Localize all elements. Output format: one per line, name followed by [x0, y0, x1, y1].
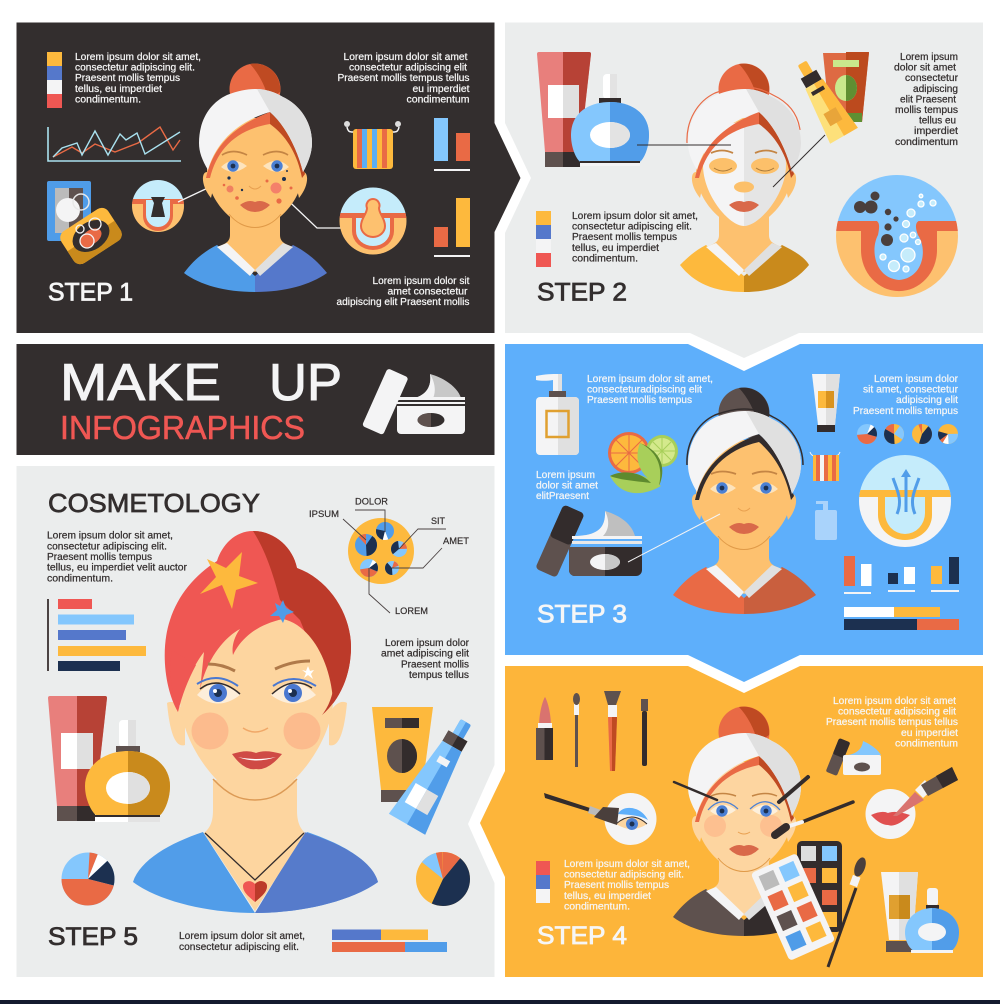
- text block: step 5 bottom: consectetur adipiscing elit.: [179, 942, 299, 953]
- panel: step 2: [505, 22, 983, 358]
- text block: step 1 left: Praesent mollis tempus: [75, 73, 180, 84]
- icon: green tube: [823, 52, 869, 122]
- text block: step 2 left: tellus, eu imperdiet: [572, 243, 659, 254]
- step 2 label: STEP 2: [537, 278, 627, 306]
- text block: cosmetology intro: consectetur adipiscing elit.: [47, 541, 167, 552]
- icon: cream jar: [362, 368, 465, 435]
- icon: citrus and leaves: [608, 432, 678, 493]
- icon: small jar: [826, 738, 881, 776]
- text block: step 2 top right: tellus eu: [919, 116, 956, 127]
- text block: cosmetology intro: tellus, eu imperdiet velit auctor: [47, 563, 188, 574]
- panel: step 4: [480, 666, 983, 977]
- text block: step 4 top right: eu imperdiet: [901, 728, 958, 739]
- text block: step 3 mid left: [536, 470, 598, 502]
- woman: step 2 with mask: [680, 64, 809, 292]
- chart labels: [309, 496, 469, 617]
- text block: step 3 mid left: Lorem ipsum: [536, 470, 595, 481]
- icon: blue perfume: [571, 74, 649, 166]
- text block: cosmetology intro: condimentum.: [47, 573, 113, 584]
- text block: step 1 top right: Lorem ipsum dolor sit amet: [344, 52, 468, 63]
- text block: step 1 top right: consectetur adipiscing elit: [349, 63, 467, 74]
- text block: step 1 top right: eu imperdiet: [412, 84, 470, 95]
- text block: step 3 top right: [853, 374, 959, 417]
- icon: yellow perfume: [85, 720, 170, 822]
- callout line: pimple: [275, 188, 345, 228]
- heading: cosmetology: COSMETOLOGY: [48, 490, 260, 518]
- icon: eye makeup: [604, 793, 656, 845]
- small pie charts: [857, 424, 958, 444]
- text block: step 4 left: [564, 859, 690, 912]
- chart labels: IPSUM: [309, 509, 339, 520]
- callout line: tube to mask: [773, 135, 825, 187]
- bar chart: blue and orange: [434, 118, 470, 171]
- text block: step 2 top right: adipiscing: [913, 84, 958, 95]
- step 1 label: STEP 1: [48, 278, 133, 306]
- stacked bars: step 3: [844, 607, 959, 630]
- icon: white tube: [812, 374, 840, 432]
- text block: step 2 left: Praesent mollis tempus: [572, 232, 677, 243]
- bar charts: step 3: [844, 556, 959, 594]
- text block: step 5 right: amet adipiscing elit: [381, 649, 469, 660]
- icon: white palette: [751, 853, 835, 961]
- chart: palette pie cluster: [343, 510, 446, 613]
- text block: step 3 top left: consecteturadipiscing elit: [587, 385, 702, 396]
- panel: title: [16, 344, 494, 455]
- colour swatches: [47, 52, 62, 108]
- panel: step 3: [505, 344, 983, 682]
- text block: step 2 top right: mollis tempus: [895, 105, 958, 116]
- text block: step 3 top left: [587, 374, 713, 406]
- bottom bar: [0, 1000, 1000, 1004]
- text block: step 3 top right: sit amet, consectetur: [863, 385, 959, 396]
- text block: step 1 left: consectetur adipiscing elit.: [75, 63, 195, 74]
- text block: step 4 left: condimentum.: [564, 901, 630, 912]
- heading: make up: UP: [269, 354, 342, 412]
- icon: small brush: [573, 693, 580, 767]
- heading: make up: [60, 354, 342, 412]
- text block: step 1 left: condimentum.: [75, 94, 141, 105]
- icon: pump bottle: [536, 374, 579, 455]
- line chart: [48, 127, 181, 161]
- text block: step 2 left: [572, 211, 698, 264]
- heading: infographics: INFOGRAPHICS: [60, 409, 305, 446]
- text block: step 2 top right: consectetur: [905, 73, 959, 84]
- icon: dark cream jar: [535, 504, 642, 578]
- icon: white tube and blue perfume: [881, 872, 959, 953]
- icon: eye brush: [544, 793, 619, 825]
- text block: step 3 top right: Lorem ipsum dolor: [874, 374, 959, 385]
- panel: step 1: [16, 22, 520, 333]
- chart labels: DOLOR: [355, 496, 388, 508]
- icon: cleansing bubbles: [880, 194, 936, 272]
- text block: step 1 left: Lorem ipsum dolor sit amet,: [75, 52, 201, 63]
- text block: step 4 top right: Praesent mollis tempus tellus: [826, 717, 958, 728]
- text block: step 5 bottom: [179, 931, 305, 953]
- text block: step 5 right: tempus tellus: [409, 670, 469, 681]
- text block: step 2 left: Lorem ipsum dolor sit amet,: [572, 211, 698, 222]
- text block: step 1 left: tellus, eu imperdiet: [75, 84, 162, 95]
- stacked bars: step 5: [332, 930, 447, 952]
- icon: striped towel: [810, 452, 840, 481]
- text block: step 3 top left: Praesent mollis tempus: [587, 395, 692, 406]
- text block: step 4 left: Lorem ipsum dolor sit amet,: [564, 859, 690, 870]
- text block: cosmetology intro: Praesent mollis tempus: [47, 552, 152, 563]
- pie chart: left: [62, 852, 114, 906]
- text block: step 2 top right: imperdiet: [914, 126, 958, 137]
- text block: step 3 mid left: elitPraesent: [536, 491, 589, 502]
- panel: step 5 cosmetology: [16, 466, 494, 977]
- icon: dark palette: [797, 841, 842, 932]
- icon: pore cleansing circle: [836, 175, 958, 298]
- text block: step 4 left: tellus, eu imperdiet: [564, 891, 651, 902]
- icon: upward arrows: [893, 469, 919, 514]
- text block: step 4 top right: Lorem ipsum dolor sit amet: [833, 696, 956, 707]
- icon: blue tube: [389, 712, 484, 835]
- icon: yellow tube: [372, 707, 433, 802]
- chart labels: AMET: [443, 536, 469, 547]
- text block: step 4 top right: consectetur adipiscing elit: [838, 707, 956, 718]
- woman: step 1: [184, 64, 327, 292]
- icon: blackhead pore callout: [132, 180, 184, 232]
- text block: step 2 top right: elit Praesent: [900, 94, 956, 105]
- step 4 label: STEP 4: [537, 922, 627, 950]
- text block: step 5 bottom: Lorem ipsum dolor sit amet,: [179, 931, 305, 942]
- text block: step 3 top left: Lorem ipsum dolor sit amet,: [587, 374, 713, 385]
- callout line: blackhead: [178, 178, 229, 202]
- text block: step 1 bottom right: amet consectetur: [388, 287, 468, 298]
- callout line: perfume to mask: [637, 144, 731, 146]
- colour swatches: [536, 211, 551, 267]
- text block: step 1 top right: condimentum: [406, 94, 470, 105]
- callout line: jar to cheek: [628, 514, 720, 562]
- text block: step 4 top right: condimentum: [895, 738, 958, 749]
- text block: step 2 top right: dolor sit amet: [894, 63, 956, 74]
- text block: step 4 left: Praesent mollis tempus: [564, 880, 669, 891]
- step 5 label: STEP 5: [48, 923, 138, 951]
- icon: towel: [344, 121, 401, 169]
- woman: step 5 large portrait: [133, 531, 378, 913]
- icon: red tube: [48, 696, 107, 821]
- icon: lipstick: [536, 697, 553, 760]
- text block: step 5 right: [381, 638, 470, 681]
- icon: mascara: [641, 699, 648, 766]
- text block: step 5 right: Praesent mollis: [401, 659, 469, 670]
- text block: step 5 right: Lorem ipsum dolor: [385, 638, 470, 649]
- icon: pale bottle: [815, 501, 837, 540]
- icon: powder brush: [604, 691, 621, 771]
- icon: red tube: [537, 52, 591, 167]
- pie chart: right: [416, 852, 470, 906]
- text block: step 2 left: condimentum.: [572, 253, 638, 264]
- text block: step 3 top right: adipiscing elit: [896, 395, 958, 406]
- text block: step 2 top right: [894, 52, 959, 148]
- woman: step 3: [673, 388, 816, 614]
- text block: step 2 top right: Lorem ipsum: [900, 52, 958, 63]
- text block: step 1 bottom right: adipiscing elit Praesent mollis: [336, 297, 470, 308]
- text block: step 1 bottom right: Lorem ipsum dolor sit: [372, 276, 470, 287]
- text block: step 3 top right: Praesent mollis tempus: [853, 406, 958, 417]
- icon: long brush: [828, 856, 868, 967]
- heading: make up: MAKE: [60, 354, 221, 412]
- icon: soap and card: [47, 181, 125, 267]
- text block: step 1 bottom right: [336, 276, 470, 308]
- icon: pimple pore callout: [339, 187, 407, 256]
- icon: lips with lipstick: [866, 767, 958, 839]
- colour swatches: [536, 861, 550, 903]
- chart labels: SIT: [431, 516, 445, 527]
- text block: step 1 left: [75, 52, 201, 105]
- text block: step 2 left: consectetur adipiscing elit.: [572, 222, 692, 233]
- text block: step 4 top right: [826, 696, 958, 749]
- text block: cosmetology intro: Lorem ipsum dolor sit amet,: [47, 531, 173, 542]
- chart labels: LOREM: [395, 606, 428, 617]
- step 3 label: STEP 3: [537, 600, 627, 628]
- text block: step 1 top right: Praesent mollis tempus tellus: [338, 73, 470, 84]
- text block: step 2 top right: condimentum: [895, 137, 958, 148]
- text block: step 4 left: consectetur adipiscing elit.: [564, 870, 684, 881]
- icon: brushes on face: [674, 777, 853, 835]
- text block: cosmetology intro: [47, 531, 188, 584]
- horizontal bar chart: [47, 599, 146, 671]
- icon: yellow tube: [788, 55, 858, 144]
- bar chart: orange and yellow: [434, 198, 470, 257]
- woman: step 4: [673, 706, 816, 936]
- text block: step 1 top right: [338, 52, 470, 105]
- icon: pore opening circle: [859, 455, 951, 547]
- text block: step 3 mid left: dolor sit amet: [536, 481, 598, 492]
